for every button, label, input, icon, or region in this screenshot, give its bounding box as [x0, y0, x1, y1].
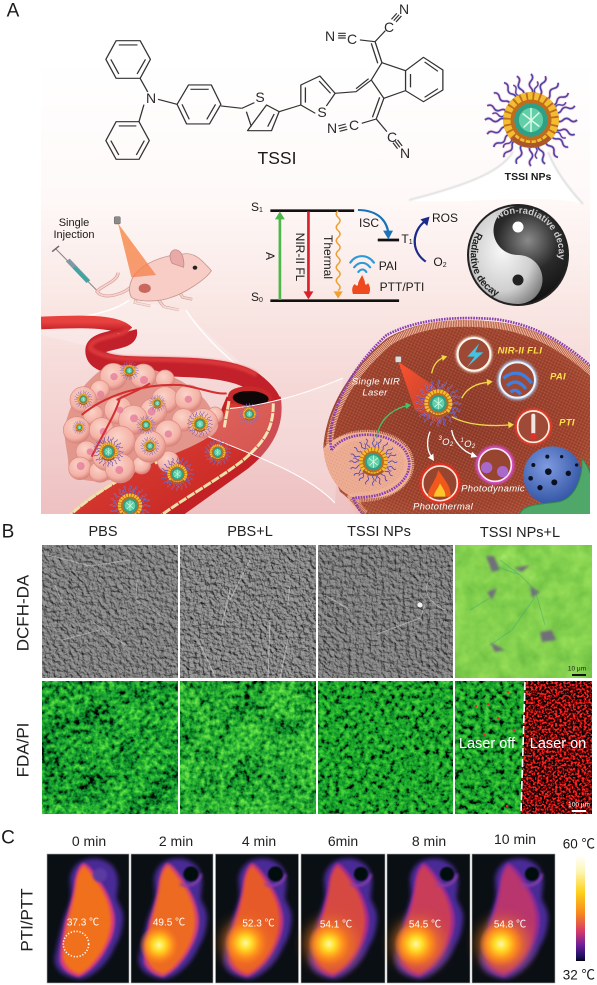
thermal image 6 min: 54.1 ℃: [320, 920, 352, 930]
panel B: cell imaging grid: [2, 522, 592, 814]
Jablonski energy diagram: [251, 200, 458, 304]
zoom cone under TSSI nanoparticle: [407, 150, 583, 204]
atom labels: C: [349, 117, 359, 133]
icon: photothermal circle: [420, 463, 460, 503]
colour bar min label: 32 ℃: [563, 968, 595, 982]
mouse with laser and injection: Single: [59, 217, 89, 229]
laser cone in cell: [398, 362, 442, 425]
laser and modality labels: PAI: [550, 372, 566, 382]
atom labels: N: [146, 90, 156, 106]
laser and modality labels: O: [464, 438, 472, 450]
Jablonski energy diagram: 0: [259, 296, 263, 304]
Jablonski energy diagram: 1: [409, 238, 413, 246]
thick vessel: [95, 332, 272, 403]
atom labels: N: [325, 28, 335, 44]
panel A: synthesis and mechanism: [6, 0, 590, 514]
atom labels: N: [399, 1, 409, 17]
time headings: 4 min: [242, 833, 276, 849]
TSSI molecular structure: [106, 1, 443, 168]
Jablonski energy diagram: O: [433, 255, 443, 269]
FDA/PI TSSI NPs+L laser off/on micrograph: Laser off: [459, 736, 516, 752]
time headings: [72, 831, 536, 849]
colour bar max label: 60 ℃: [563, 836, 595, 852]
column headings: PBS: [88, 524, 118, 540]
100 micrometre scale bar: 100 μm: [568, 802, 590, 808]
laser and modality labels: Photodynamic: [461, 484, 525, 494]
column headings: TSSI NPs+L: [480, 525, 560, 541]
tumour cell enlarged with theranostic modes: [323, 318, 595, 515]
laser and modality labels: NIR-II FLI: [498, 346, 542, 356]
Jablonski energy diagram: ROS: [432, 211, 458, 225]
column headings: TSSI NPs: [347, 524, 411, 540]
tumour feeding vessels: [82, 383, 227, 457]
icon: laser head: [114, 217, 120, 224]
atom labels: S: [317, 104, 327, 120]
large cut-away vessel: [70, 385, 282, 515]
time headings: 0 min: [72, 833, 106, 849]
Jablonski energy diagram: 1: [259, 206, 263, 214]
green organelle: [519, 458, 595, 515]
icon: NIR laser head: [395, 356, 401, 362]
label B: B: [2, 522, 14, 542]
mouse with laser and injection: [52, 217, 211, 310]
central nanoparticle: [415, 380, 461, 426]
Jablonski energy diagram: Thermal: [321, 235, 335, 279]
thin vessel: [41, 322, 127, 332]
tumour cell cluster: [63, 363, 223, 483]
thermal image 0 min: 37.3 ℃: [67, 918, 99, 928]
laser and modality labels: 2: [449, 442, 454, 448]
column headings: [88, 524, 560, 541]
DCFH-DA TSSI NPs micrograph: [318, 545, 453, 678]
thermal image 8 min: [387, 854, 470, 983]
FDA/PI TSSI NPs+L laser off/on micrograph: [455, 681, 592, 814]
colour bar: [576, 855, 585, 961]
label A: A: [7, 0, 20, 22]
Jablonski energy diagram: PAI: [379, 259, 397, 273]
thermal image 4 min: 52.3 ℃: [242, 918, 275, 930]
icon: flame: [352, 275, 370, 294]
yin-yang radiative decay disc: Non-radiative decay: [497, 208, 564, 260]
thermal image 6 min: [301, 854, 385, 983]
10 micrometre scale bar: [568, 666, 586, 676]
molecule name TSSI: TSSI: [258, 148, 296, 168]
FDA/PI PBS micrograph: [42, 681, 178, 814]
FDA/PI TSSI NPs micrograph: [318, 681, 453, 814]
arrows from nanoparticle: [377, 355, 514, 461]
panel C: thermal imaging series: [1, 828, 595, 983]
TSSI NPs nanoparticle icon: [485, 74, 577, 166]
icon: fluorescence circle: [456, 336, 492, 372]
Jablonski energy diagram: NIR-II FL: [293, 233, 307, 282]
Jablonski energy diagram: S: [251, 200, 259, 214]
nanoparticle in endosome: [349, 438, 397, 486]
icon: syringe: [52, 246, 97, 291]
tumour base mass: [65, 365, 215, 481]
thermal image 10 min: 54.8 ℃: [494, 920, 526, 930]
Jablonski energy diagram: T: [401, 232, 409, 246]
laser and modality labels: Single NIR: [352, 376, 400, 388]
Jablonski energy diagram: ISC: [359, 216, 379, 230]
blue porous sphere: [523, 446, 582, 505]
laser and modality labels: [352, 346, 575, 512]
atom labels: [146, 1, 410, 161]
column headings: PBS+L: [227, 524, 273, 540]
laser and modality labels: O: [442, 436, 450, 448]
DCFH-DA PBS+L micrograph: [180, 545, 316, 678]
time headings: 10 min: [494, 831, 536, 847]
time headings: 6min: [328, 833, 358, 849]
time headings: 2 min: [159, 833, 193, 849]
label C: C: [1, 828, 15, 848]
Jablonski energy diagram: S: [251, 290, 259, 304]
TSSI NPs label: TSSI NPs: [505, 171, 551, 183]
DCFH-DA TSSI NPs+L green micrograph: [455, 545, 592, 678]
time headings: 8 min: [412, 833, 446, 849]
blood vessel and tumour illustration: [41, 322, 343, 526]
yin-yang radiative decay disc: Radiative decay: [470, 232, 500, 297]
mouse body: [97, 250, 211, 310]
icon: photoacoustic circle: [497, 360, 537, 400]
Jablonski energy diagram: PTT/PTI: [380, 280, 424, 294]
yin-yang radiative decay disc: [467, 204, 569, 306]
atom labels: S: [255, 89, 265, 105]
translucent zoom wedge to cell: [208, 378, 343, 503]
thermal image 10 min: [472, 854, 555, 983]
atom labels: C: [347, 31, 357, 47]
cell body and membrane: [323, 318, 595, 515]
icon: acoustic waves: [350, 256, 374, 272]
thermal image 2 min: 49.5 ℃: [153, 918, 185, 928]
laser cone: [118, 223, 156, 277]
atom labels: C: [384, 19, 394, 35]
row label FDA/PI: FDA/PI: [14, 723, 32, 777]
thermal image 8 min: 54.5 ℃: [409, 920, 441, 930]
row label PTI/PTT: PTI/PTT: [18, 888, 36, 952]
100 micrometre scale bar: [568, 802, 590, 812]
Jablonski energy diagram: A: [263, 252, 277, 260]
Jablonski energy diagram: 2: [443, 262, 447, 268]
row label DCFH-DA: DCFH-DA: [14, 574, 32, 651]
thermal image 2 min: [131, 854, 213, 983]
laser and modality labels: Laser: [362, 388, 388, 398]
mouse with laser and injection: Injection: [54, 229, 94, 241]
laser and modality labels: 3: [439, 436, 443, 442]
white zoom wedge from mouse to vessel: [84, 300, 236, 364]
cell nuclei: [77, 373, 192, 474]
laser and modality labels: PTI: [559, 418, 575, 428]
atom labels: C: [387, 129, 397, 145]
laser and modality labels: 1: [461, 438, 464, 444]
icon: photodynamic circle: [476, 446, 514, 484]
laser and modality labels: 2: [471, 444, 476, 450]
FDA/PI TSSI NPs+L laser off/on micrograph: Laser on: [530, 736, 586, 752]
10 micrometre scale bar: 10 μm: [568, 666, 586, 672]
FDA/PI PBS+L micrograph: [180, 681, 316, 814]
DCFH-DA PBS micrograph: [42, 545, 178, 678]
icon: thermometer circle: [515, 409, 551, 445]
atom labels: N: [327, 120, 337, 136]
laser and modality labels: Photothermal: [413, 502, 474, 512]
panel A background gradient: [41, 60, 590, 514]
thermal image 4 min: [216, 854, 298, 983]
thermal image 0 min: [47, 854, 129, 983]
nanoparticles in vessel and tumour: [72, 361, 260, 526]
atom labels: N: [400, 145, 410, 161]
